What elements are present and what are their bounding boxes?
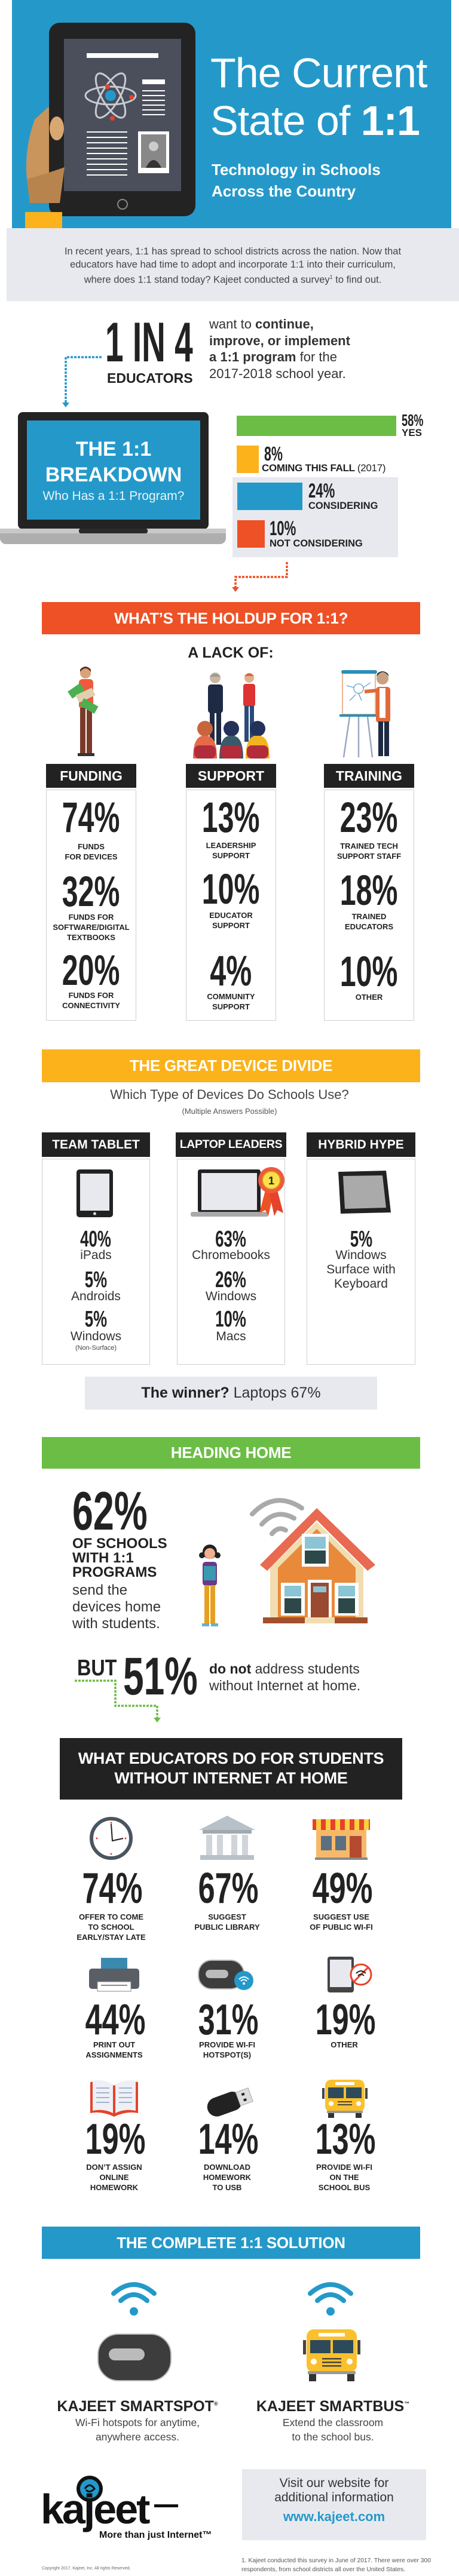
product: kajeet smartbus: KAJEET SMARTBUS™	[256, 2398, 409, 2415]
logo: kajeet	[41, 2476, 220, 2543]
stat text: 51%: do not address students	[209, 1661, 360, 1677]
product: kajeet smartspot: anywhere access.	[96, 2431, 179, 2443]
icon: storefront	[313, 1819, 370, 1860]
callout: visit website: additional information	[274, 2491, 394, 2504]
panel: laptop leaders: 63%	[216, 1227, 246, 1252]
icon: tablet with no wifi	[328, 1957, 372, 1992]
panel: support: LEADERSHIP	[206, 841, 256, 850]
title: State of 1:1	[210, 97, 420, 144]
grid item: 74% offer to come early: 74%	[82, 1865, 142, 1912]
grid item: 13% wi-fi on bus: ON THE	[329, 2173, 359, 2182]
grid item: 67% public library: SUGGEST	[208, 1912, 246, 1921]
panel: laptop leaders: 10%	[216, 1307, 246, 1332]
panel: laptop leaders: LAPTOP LEADERS	[180, 1138, 282, 1151]
header panel	[12, 0, 451, 228]
stat text: 51%: without Internet at home.	[209, 1678, 360, 1693]
illustration: support group	[193, 673, 270, 759]
panel: support: COMMUNITY	[207, 992, 255, 1001]
icon: hotspot device	[198, 1960, 253, 1990]
grid item: 14% usb: 14%	[198, 2116, 258, 2163]
grid item: 19% other	[316, 1957, 375, 2049]
laptop: 1:1 breakdown	[0, 412, 226, 544]
stat: 62% send devices home: devices home	[72, 1599, 161, 1615]
grid item: 44% print out: PRINT OUT	[93, 2040, 135, 2049]
intro text band: where does 1:1 stand today? Kajeet conducted a survey1 to find out.	[84, 274, 381, 285]
panel: training: SUPPORT STAFF	[337, 852, 401, 861]
bar chart: who has a 1:1 program: CONSIDERING	[308, 501, 378, 511]
icon: surface tablet	[338, 1171, 391, 1214]
panel: laptop leaders: Windows	[206, 1289, 256, 1303]
panel: training: TRAINING	[336, 768, 402, 784]
panel: funding: 74%	[62, 794, 120, 842]
grid item: 49% public wi-fi: OF PUBLIC WI-FI	[310, 1923, 373, 1932]
bar chart: who has a 1:1 program: NOT CONSIDERING	[270, 538, 363, 549]
grid item: 19% don't assign online: HOMEWORK	[90, 2183, 138, 2192]
subheading: which devices: Which Type of Devices Do Schools Use?	[110, 1087, 349, 1102]
grid item: 49% public wi-fi	[310, 1819, 373, 1932]
callout: winner: The winner? Laptops 67%	[141, 1384, 321, 1401]
panel: hybrid hype: Surface with	[326, 1263, 396, 1276]
product: kajeet smartbus: to the school bus.	[292, 2431, 374, 2443]
grid item: 13% wi-fi on bus: SCHOOL BUS	[319, 2183, 370, 2192]
panel: funding: FUNDS	[78, 842, 105, 851]
grid item: 19% don't assign online: 19%	[85, 2116, 145, 2163]
panel: laptop leaders: 26%	[216, 1267, 246, 1292]
laptop: 1:1 breakdown: THE 1:1	[76, 438, 151, 460]
banner: what educators do: WHAT EDUCATORS DO FOR STUDENTS	[78, 1749, 384, 1767]
panel: hybrid hype	[307, 1132, 415, 1365]
banner: what educators do: WITHOUT INTERNET AT HOME	[114, 1769, 348, 1787]
grid item: 19% don't assign online: DON’T ASSIGN	[86, 2163, 142, 2172]
bar chart: who has a 1:1 program: COMING THIS FALL (2017)	[262, 462, 385, 474]
intro text band	[7, 228, 459, 301]
panel: hybrid hype: 5%	[350, 1227, 372, 1252]
logo: kajeet: More than just Internet™	[99, 2530, 212, 2540]
product: kajeet smartspot: Wi-Fi hotspots for anytime,	[75, 2417, 200, 2428]
stat: 62% send devices home: PROGRAMS	[72, 1564, 157, 1580]
grid item: 13% wi-fi on bus	[302, 2078, 386, 2192]
grid item: 14% usb	[185, 2078, 269, 2192]
stat: but 51%: BUT	[77, 1656, 117, 1681]
stat text: a 1:1 program for the	[209, 349, 337, 364]
product: kajeet smartbus: Extend the classroom	[283, 2417, 383, 2428]
panel: team tablet	[42, 1132, 150, 1365]
grid item: 13% wi-fi on bus: PROVIDE WI-FI	[316, 2163, 372, 2172]
panel: training: 18%	[340, 867, 398, 914]
panel: support: 10%	[202, 866, 260, 913]
panel: support	[186, 764, 276, 1021]
stat text: improve, or implement	[209, 333, 350, 348]
logo: kajeet: kajeet	[41, 2486, 150, 2532]
grid item: 49% public wi-fi: 49%	[313, 1865, 372, 1912]
grid item: 44% print out: ASSIGNMENTS	[85, 2050, 143, 2059]
panel: team tablet: 40%	[81, 1227, 111, 1252]
laptop: 1:1 breakdown: BREAKDOWN	[45, 463, 182, 486]
panel: funding: FUNDS FOR	[69, 913, 114, 922]
grid item: 19% other: 19%	[316, 1996, 375, 2044]
grid item: 14% usb: HOMEWORK	[203, 2173, 251, 2182]
grid item: 67% public library	[194, 1816, 260, 1932]
callout: visit website: www.kajeet.com	[283, 2509, 385, 2524]
panel: support: SUPPORT	[212, 1002, 250, 1011]
banner: what educators do	[60, 1738, 402, 1800]
subtitle	[212, 161, 381, 200]
stat text	[209, 317, 350, 381]
icon: tablet	[76, 1169, 113, 1217]
panel: training: 10%	[340, 948, 398, 996]
arrow: blue dotted	[62, 356, 102, 407]
stat: but 51%: 51%	[123, 1646, 198, 1706]
banner: great device divide	[42, 1049, 420, 1082]
subtitle: Across the Country	[212, 182, 356, 200]
grid item: 74% offer to come early: EARLY/STAY LATE	[76, 1933, 146, 1942]
stat: 62% send devices home: WITH 1:1	[72, 1550, 134, 1566]
stat: 1 in 4 educators: EDUCATORS	[107, 370, 193, 386]
callout: winner	[85, 1377, 377, 1410]
panel: team tablet: Androids	[71, 1289, 121, 1303]
bar chart: who has a 1:1 program: 8%	[264, 443, 283, 465]
bar chart: who has a 1:1 program: YES	[402, 427, 422, 438]
stat text: want to continue,	[209, 317, 314, 331]
grid item: 74% offer to come early: TO SCHOOL	[88, 1923, 134, 1932]
product: kajeet smartbus	[243, 2280, 423, 2445]
panel: support: SUPPORT	[212, 851, 250, 860]
panel: support: SUPPORT	[212, 921, 250, 930]
icon: printer	[89, 1958, 139, 1991]
grid item: 14% usb: TO USB	[213, 2183, 241, 2192]
stat: 62% send devices home: 62%	[72, 1481, 148, 1542]
panel: support: EDUCATOR	[209, 911, 253, 920]
panel: funding: SOFTWARE/DIGITAL	[53, 923, 130, 932]
panel: laptop leaders: Chromebooks	[192, 1248, 270, 1262]
copyright: Copyright 2017, Kajeet, Inc. All rights Reserved.	[42, 2566, 131, 2571]
illustration: hand holding tablet	[25, 23, 195, 228]
bar chart: who has a 1:1 program: 10%	[270, 517, 296, 540]
stat: 1 in 4 educators: 1 IN 4	[105, 311, 193, 373]
panel: support: 4%	[210, 948, 252, 995]
icon: clock	[90, 1817, 133, 1860]
grid item: 67% public library: 67%	[198, 1865, 258, 1912]
grid item: 14% usb: DOWNLOAD	[204, 2163, 250, 2172]
bar chart: who has a 1:1 program: 58%	[402, 411, 423, 429]
heading: a lack of: A LACK OF:	[188, 644, 274, 661]
panel: training: TRAINED	[352, 912, 386, 921]
panel: team tablet: 5%	[85, 1307, 107, 1332]
callout: visit website: Visit our website for	[280, 2476, 388, 2490]
panel: funding: FUNDING	[60, 768, 123, 784]
laptop: 1:1 breakdown: Who Has a 1:1 Program?	[43, 489, 184, 503]
grid item: 19% don't assign online	[85, 2080, 145, 2192]
panel: funding: CONNECTIVITY	[62, 1001, 120, 1010]
bar chart: who has a 1:1 program	[232, 411, 423, 557]
grid item: 31% hotspots: PROVIDE WI-FI	[199, 2040, 255, 2049]
icon: usb drive	[202, 2082, 256, 2118]
bar chart: who has a 1:1 program: 24%	[308, 480, 335, 502]
illustration: house with wifi	[250, 1498, 375, 1623]
banner: heading home: HEADING HOME	[171, 1444, 291, 1462]
icon: open book	[89, 2080, 139, 2118]
banner: heading home	[42, 1437, 420, 1469]
icon: wifi	[110, 2280, 158, 2317]
icon: school bus	[322, 2078, 368, 2118]
grid item: 13% wi-fi on bus: 13%	[316, 2116, 375, 2163]
grid item: 44% print out: 44%	[85, 1996, 145, 2044]
banner: complete solution	[42, 2227, 420, 2259]
panel: training: TRAINED TECH	[340, 842, 398, 851]
icon: school bus	[303, 2328, 360, 2383]
grid item: 19% other: OTHER	[331, 2040, 358, 2049]
panel: hybrid hype: Keyboard	[334, 1277, 388, 1291]
grid item: 31% hotspots: 31%	[198, 1996, 258, 2044]
banner: complete solution: THE COMPLETE 1:1 SOLUTION	[117, 2234, 345, 2252]
intro text band: educators have had time to adopt and incorporate 1:1 into their curriculum,	[70, 259, 396, 270]
stat: 62% send devices home: send the	[72, 1582, 127, 1598]
panel: training: 23%	[340, 794, 398, 842]
panel: funding: 32%	[62, 868, 120, 916]
panel: team tablet: Windows	[71, 1330, 121, 1343]
grid item: 44% print out	[85, 1958, 145, 2059]
panel: hybrid hype: Windows	[335, 1248, 387, 1262]
panel: funding: TEXTBOOKS	[67, 933, 115, 942]
grid item: 31% hotspots: HOTSPOT(S)	[203, 2050, 251, 2059]
panel: support: SUPPORT	[198, 768, 264, 784]
subtitle: Technology in Schools	[212, 161, 381, 179]
callout: visit website	[242, 2469, 426, 2540]
icon: laptop with medal: 1	[268, 1175, 274, 1187]
intro text band: In recent years, 1:1 has spread to school districts across the nation. Now that	[65, 246, 401, 257]
banner: what's the holdup	[42, 602, 420, 634]
icon: wifi	[307, 2280, 354, 2317]
grid item: 19% don't assign online: ONLINE	[99, 2173, 129, 2182]
grid item: 74% offer to come early	[76, 1817, 146, 1942]
panel: laptop leaders	[176, 1132, 286, 1365]
stat text: 51%	[209, 1661, 360, 1693]
grid item: 74% offer to come early: OFFER TO COME	[79, 1912, 143, 1921]
panel: training: OTHER	[356, 993, 382, 1002]
stat: 62% send devices home	[72, 1481, 167, 1632]
panel: laptop leaders: Macs	[216, 1330, 246, 1343]
grid item: 31% hotspots	[198, 1960, 258, 2059]
arrow: orange dotted	[232, 562, 288, 592]
icon: library building	[199, 1816, 255, 1860]
illustration: trainer with flipchart	[339, 670, 390, 757]
product: kajeet smartspot	[48, 2280, 227, 2445]
panel: funding	[46, 764, 136, 1021]
illustration: girl student	[199, 1545, 221, 1626]
panel: hybrid hype: HYBRID HYPE	[318, 1138, 404, 1152]
banner: what's the holdup: WHAT’S THE HOLDUP FOR 1:1?	[114, 609, 348, 627]
stat: 62% send devices home: with students.	[72, 1616, 160, 1632]
note: multiple answers: (Multiple Answers Possible)	[182, 1107, 277, 1116]
title: The Current	[210, 50, 427, 96]
title	[210, 50, 427, 144]
stat text: 2017-2018 school year.	[209, 366, 346, 381]
banner: great device divide: THE GREAT DEVICE DIVIDE	[130, 1057, 332, 1074]
panel: team tablet: (Non-Surface)	[75, 1344, 117, 1352]
arrow: green dotted	[75, 1680, 161, 1723]
illustration: funding person with money	[68, 667, 99, 756]
panel: support: 13%	[202, 794, 260, 842]
stat: 62% send devices home: OF SCHOOLS	[72, 1536, 167, 1552]
icon: smartspot device	[97, 2333, 172, 2383]
panel: funding: FUNDS FOR	[69, 991, 114, 1000]
stat: but 51%	[77, 1646, 198, 1706]
panel: training	[324, 764, 414, 1021]
panel: team tablet: 5%	[85, 1267, 107, 1292]
panel: team tablet: iPads	[80, 1248, 112, 1262]
grid item: 67% public library: PUBLIC LIBRARY	[194, 1923, 260, 1932]
panel: funding: FOR DEVICES	[65, 852, 118, 861]
icon: laptop with medal	[191, 1167, 284, 1217]
footnote: 1. Kajeet conducted this survey in June of 2017. There were over 300 respondents, from school districts all over the United States.	[241, 2557, 431, 2573]
panel: team tablet: TEAM TABLET	[52, 1138, 140, 1152]
grid item: 49% public wi-fi: SUGGEST USE	[313, 1912, 369, 1921]
product: kajeet smartspot: KAJEET SMARTSPOT®	[57, 2398, 218, 2415]
panel: training: EDUCATORS	[345, 922, 393, 931]
panel: funding: 20%	[62, 947, 120, 994]
